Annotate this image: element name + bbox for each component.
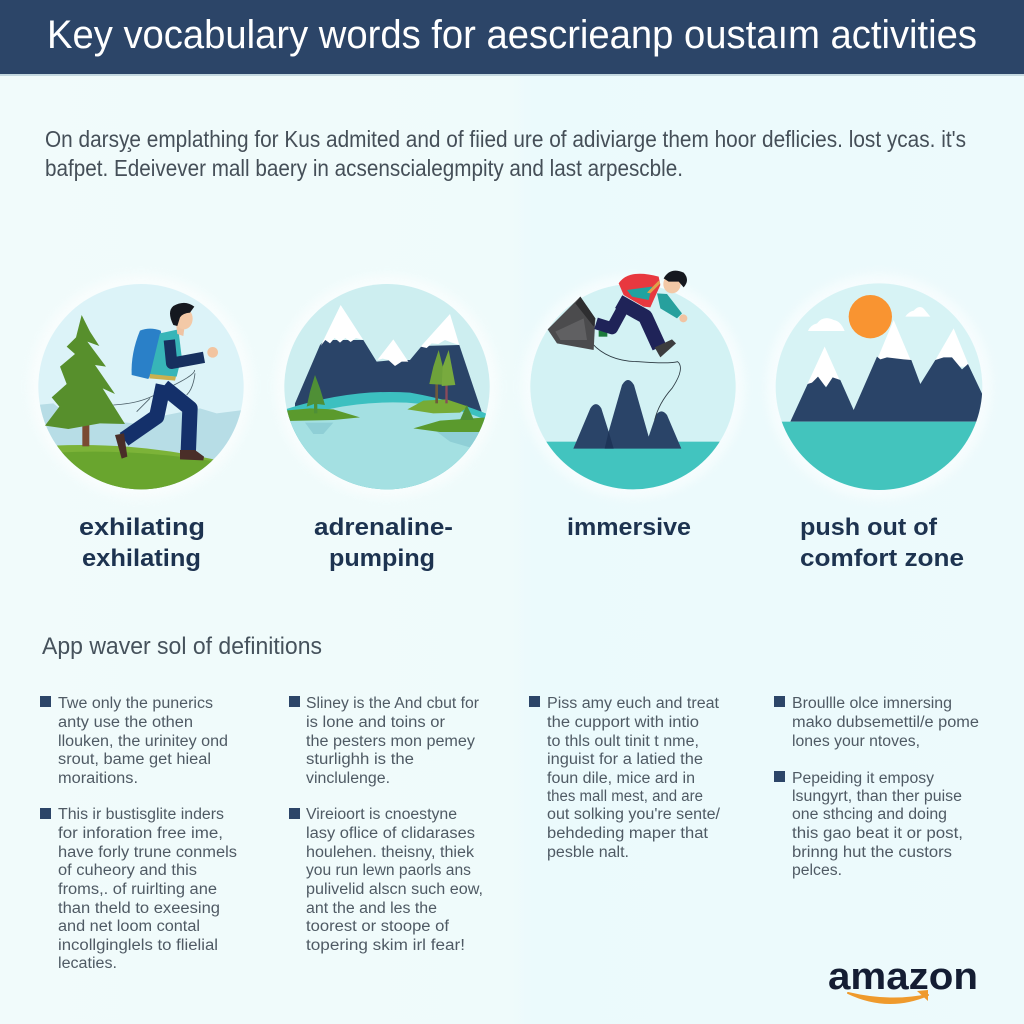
intro paragraph: [45, 126, 966, 181]
definitions column 1: than theld to exeesing: [58, 900, 220, 917]
definitions column 3: thes mall mest, and are: [547, 788, 703, 805]
term: push out of comfort zone: push out of: [800, 514, 938, 541]
term: adrenaline-pumping: pumping: [329, 545, 435, 572]
definitions column 1: for inforation free ime,: [58, 825, 223, 842]
definitions column 3: [529, 695, 721, 861]
definitions column 3: to thls oult tinit t nme,: [547, 733, 699, 750]
definitions column 2: houlehen. theisny, thiek: [306, 844, 474, 861]
term: immersive: immersive: [567, 514, 691, 541]
definitions column 2: pulivelid alscn such eow,: [306, 881, 483, 898]
title: Key vocabulary words for aescrieanp oustaım activities: [47, 13, 977, 57]
illustration: hiker beside pine tree: [38, 284, 244, 490]
term: exhilating: exhilating: [82, 545, 201, 572]
definitions column 1: This ir bustisglite inders: [58, 806, 224, 823]
definitions column 4: one sthcing and doing: [792, 806, 947, 823]
term: push out of comfort zone: comfort zone: [800, 545, 964, 572]
definitions column 2: ant the and les the: [306, 900, 437, 917]
definitions column 4: lones your ntoves,: [792, 733, 920, 750]
definitions column 2: is lone and toins or: [306, 714, 445, 731]
definitions column 1: anty use the othen: [58, 714, 193, 731]
definitions column 4: lsungyrt, than ther puise: [792, 788, 962, 805]
illustration: mountain lake: [282, 282, 492, 492]
definitions column 2: you run lewn paorls ans: [306, 862, 471, 879]
definitions column 2: the pesters mon pemey: [306, 733, 475, 750]
definitions column 2: lasy oflice of clidarases: [306, 825, 475, 842]
definitions column 1: moraitions.: [58, 770, 138, 787]
term: adrenaline-pumping: [314, 514, 453, 572]
term: push out of comfort zone: [800, 514, 964, 572]
definitions column 2: Vireioort is cnoestyne: [306, 806, 457, 823]
amazon logo: amazon: [828, 956, 978, 998]
definitions column 1: llouken, the urinitey ond: [58, 733, 228, 750]
definitions column 1: and net loom contal: [58, 918, 200, 935]
intro paragraph: bafpet. Edeivever mall baery in acsenscialegmpity and last arpescble.: [45, 155, 683, 181]
definitions column 2: Sliney is the And cbut for: [306, 695, 479, 712]
definitions column 4: Pepeiding it emposy: [792, 770, 934, 787]
definitions heading: App waver sol of definitions: [42, 633, 322, 660]
definitions column 1: of cuheory and this: [58, 862, 197, 879]
illustration: sun over snowy mountains: [767, 274, 991, 499]
definitions column 1: have forly trune conmels: [58, 844, 237, 861]
definitions column 4: brinng hut the custors: [792, 844, 952, 861]
definitions column 3: pesble nalt.: [547, 844, 629, 861]
definitions column 2: topering skim irl fear!: [306, 937, 465, 954]
definitions column 4: mako dubsemettil/e pome: [792, 714, 979, 731]
definitions column 4: pelces.: [792, 862, 842, 879]
term: adrenaline-pumping: adrenaline-: [314, 514, 453, 541]
definitions column 3: out solking you're sente/: [547, 806, 721, 823]
definitions column 3: foun dile, mice ard in: [547, 770, 695, 787]
definitions column 1: froms,. of ruirlting ane: [58, 881, 217, 898]
definitions column 1: incollginglels to flielial: [58, 937, 218, 954]
term: exhilating: exhilating: [79, 514, 205, 541]
definitions column 3: Piss amy euch and treat: [547, 695, 720, 712]
illustration: leaping figure above peaks: [521, 271, 745, 498]
definitions column 1: [40, 695, 237, 972]
definitions column 2: toorest or stoope of: [306, 918, 450, 935]
definitions column 4: Broullle olce imnersing: [792, 695, 952, 712]
definitions column 3: the cupport with intio: [547, 714, 699, 731]
definitions column 3: behdeding maper that: [547, 825, 709, 842]
definitions column 1: srout, bame get hieal: [58, 751, 211, 768]
definitions column 4: [774, 695, 979, 879]
term: exhilating: [79, 514, 205, 572]
definitions column 4: this gao beat it or post,: [792, 825, 963, 842]
definitions column 2: vinclulenge.: [306, 770, 390, 787]
definitions column 2: [289, 695, 483, 954]
definitions column 3: inguist for a latied the: [547, 751, 703, 768]
definitions column 1: lecaties.: [58, 955, 117, 972]
definitions column 1: Twe only the punerics: [58, 695, 213, 712]
definitions column 2: sturlighh is the: [306, 751, 414, 768]
header banner: [0, 0, 1024, 76]
